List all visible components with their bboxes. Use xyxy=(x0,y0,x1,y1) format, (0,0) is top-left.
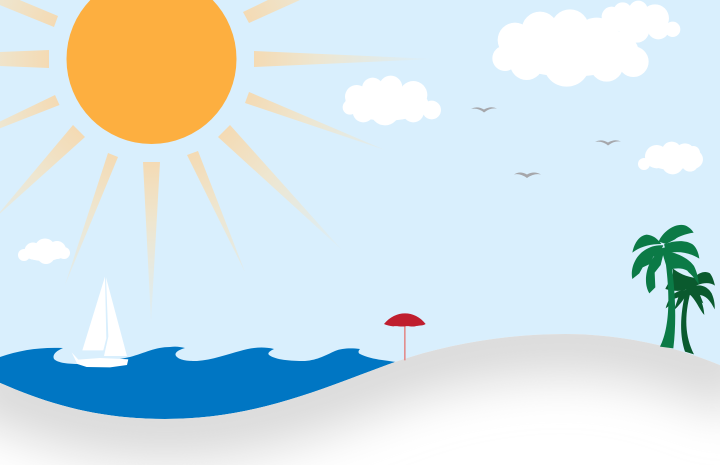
right cloud xyxy=(638,142,703,174)
large cloud xyxy=(492,1,680,87)
birds xyxy=(471,107,621,178)
beach umbrella xyxy=(384,313,426,360)
sea xyxy=(0,347,400,440)
sailboat xyxy=(72,277,128,367)
left cloud xyxy=(18,238,70,264)
left sail xyxy=(82,277,106,350)
umbrella canopy xyxy=(384,313,426,327)
back palm xyxy=(665,267,715,354)
front palm xyxy=(632,225,699,348)
hull xyxy=(72,352,128,367)
sand dune xyxy=(0,330,720,465)
middle cloud xyxy=(343,76,441,125)
umbrella pole xyxy=(404,325,406,360)
sun xyxy=(66,0,236,144)
right sail xyxy=(104,277,127,356)
palm trees xyxy=(632,225,715,354)
sun rays xyxy=(0,0,435,322)
